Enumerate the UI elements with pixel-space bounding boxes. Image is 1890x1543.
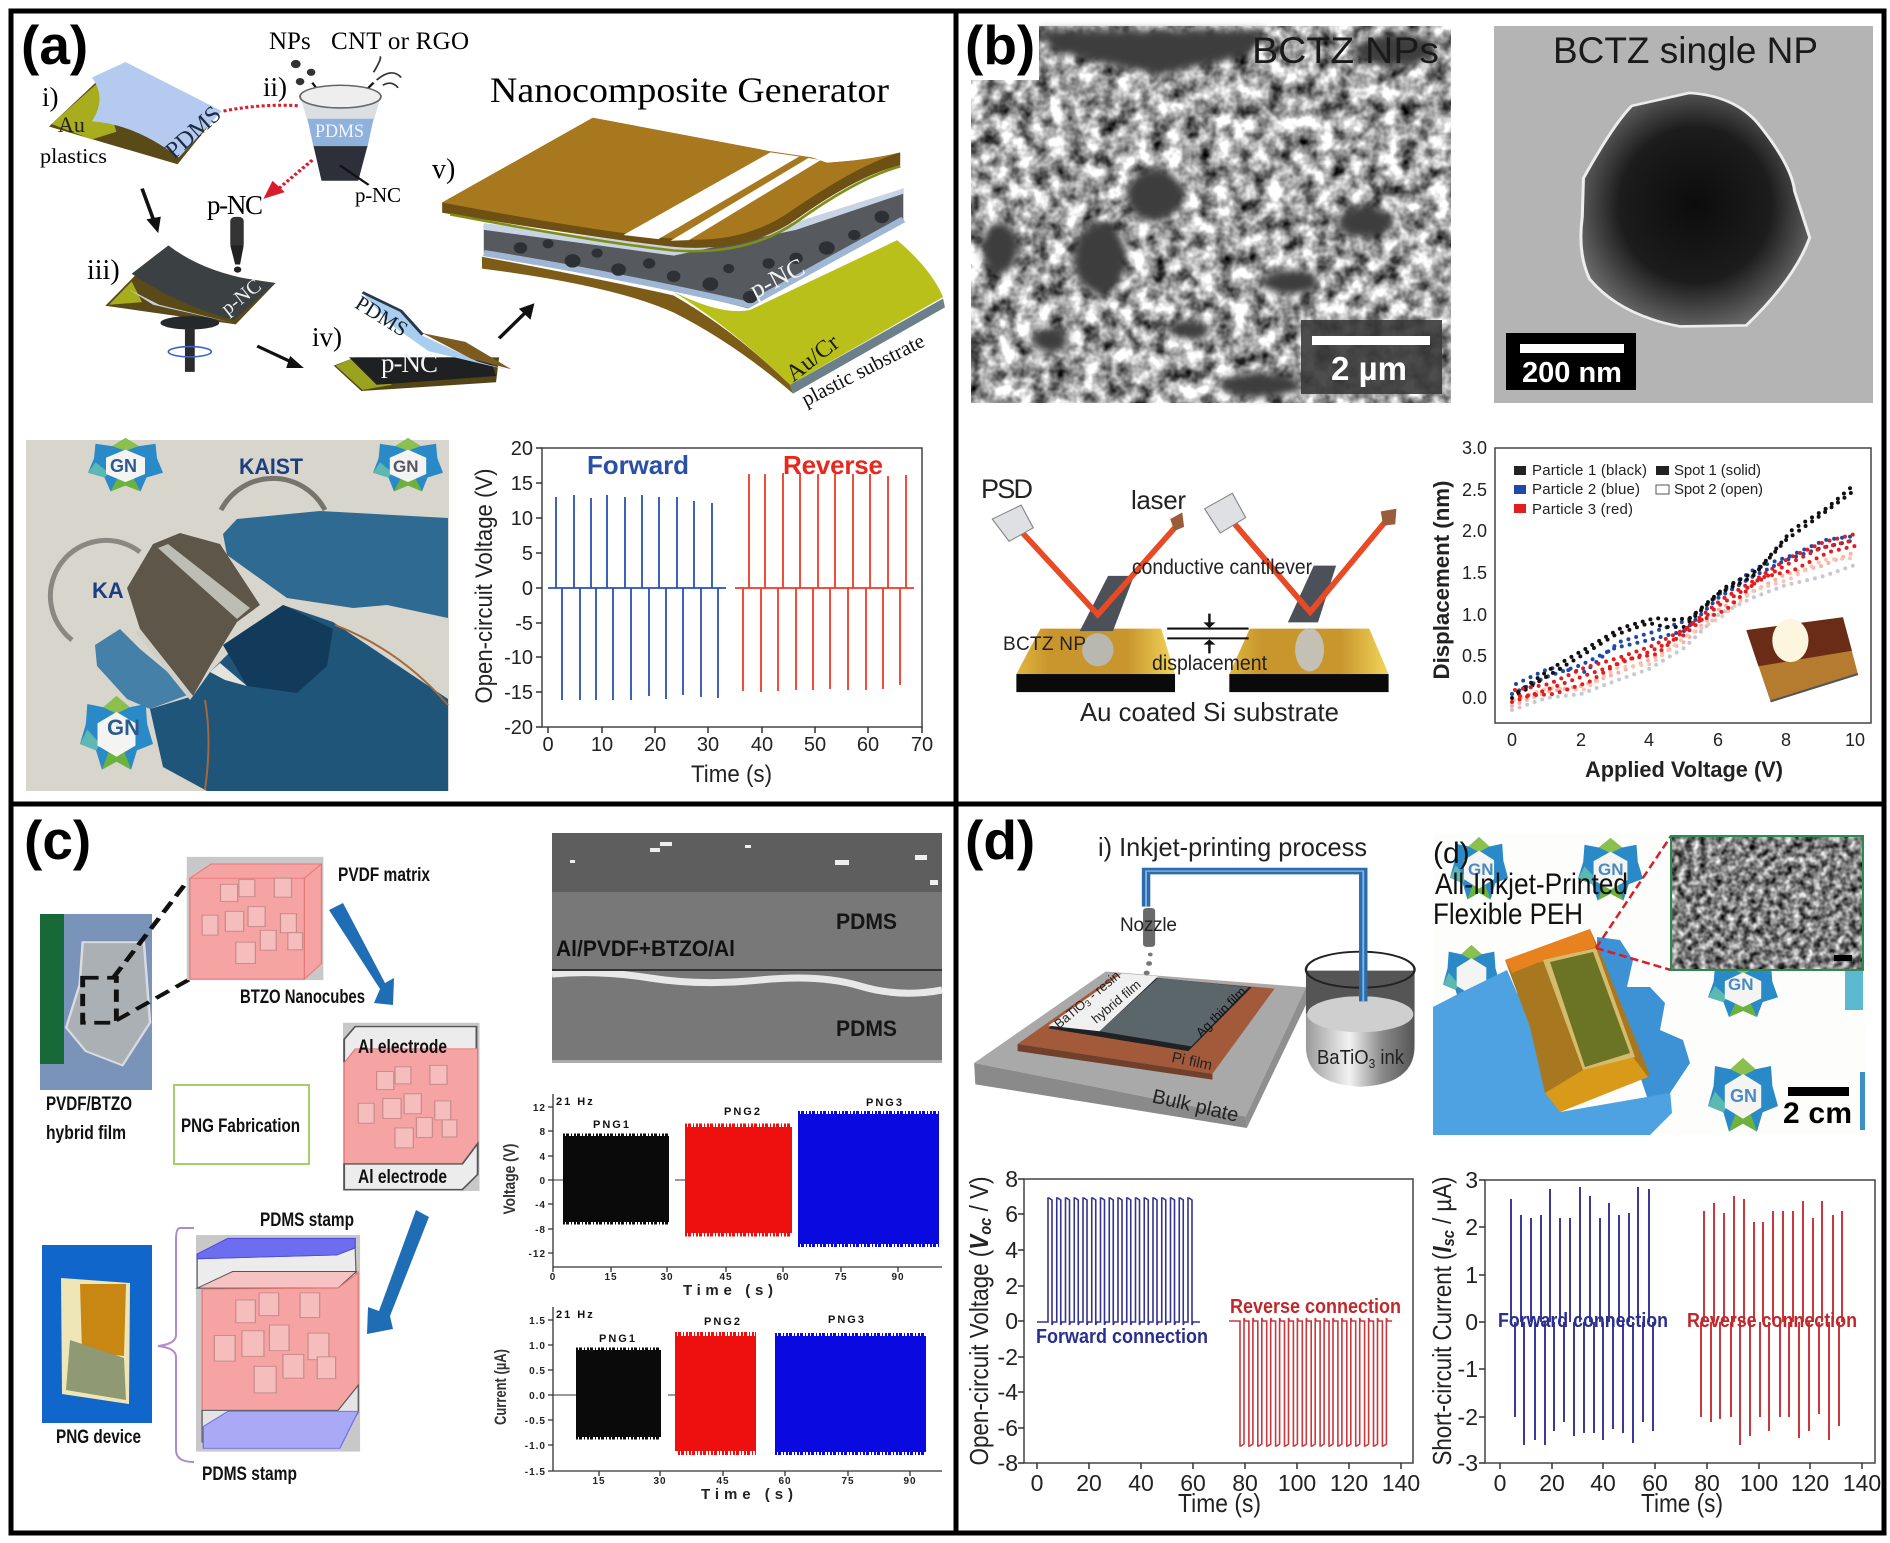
axis numbers: 2 [1465, 1214, 1478, 1240]
schematic: inkjet printing setup: BaTiO [1317, 1047, 1373, 1069]
forward series: Forward [587, 450, 689, 480]
voltage axis numbers: 30 [660, 1272, 674, 1283]
axis numbers: 4 [1005, 1237, 1018, 1263]
current axis numbers: 1.5 [529, 1316, 546, 1327]
process step i: PDMS on Au plastic: plastics [40, 144, 107, 168]
process step iii: spin coating [87, 190, 276, 372]
schematic: inkjet printing setup: Nozzle [1120, 915, 1177, 936]
chart: current of PNG1-3: 21 Hz [556, 1309, 595, 1321]
logos on photo background [50, 438, 443, 770]
chart: current of PNG1-3: PNG2 [704, 1316, 742, 1328]
GN logos on photo: GN [1730, 1086, 1757, 1106]
brace [158, 1228, 194, 1462]
process step iii: spin coating: iii) [87, 255, 120, 286]
chart: current of PNG1-3: PNG1 [599, 1333, 637, 1345]
scale bar 200 nm: 200 nm [1522, 357, 1622, 389]
diagram v: nanocomposite generator layers: Au/Cr [781, 330, 844, 387]
process step ii: cup with NPs and CNT or RGO: ii) [263, 72, 287, 102]
chart: voltage of PNG1-3: 21 Hz [556, 1096, 595, 1108]
schematic: PFM measurement of BCTZ NP: displacement [1152, 652, 1267, 675]
process step iii: spin coating: p-NC [207, 190, 263, 220]
axis numbers: 10 [1845, 730, 1865, 750]
legend: Particle 3 (red) [1532, 501, 1633, 518]
chart: voltage of PNG1-3: PNG2 [724, 1106, 762, 1118]
current axis numbers: 60 [778, 1476, 792, 1487]
GN logos on photo: GN [1598, 860, 1624, 879]
scale bar 2 µm: 2 µm [1331, 350, 1407, 387]
SEM image of BCTZ NPs [956, 14, 1451, 403]
reverse spikes [1687, 1196, 1857, 1445]
scatter data [1512, 484, 1855, 710]
axis numbers: 140 [1382, 1470, 1420, 1496]
axis numbers: 40 [1128, 1470, 1154, 1496]
voltage data blocks [553, 1114, 939, 1244]
current data blocks [553, 1336, 926, 1452]
axis numbers: -8 [998, 1450, 1018, 1476]
diagram v: nanocomposite generator layers: p-NC [745, 252, 809, 304]
axis numbers: 0 [1494, 1470, 1506, 1496]
axis numbers: 120 [1791, 1470, 1829, 1496]
chart: open-circuit voltage forward and reverse [471, 438, 933, 788]
GN logos on photo: GN [1728, 975, 1754, 994]
axis title: voltage: Open-circuit Voltage (V [964, 1215, 994, 1466]
axis ticks and numbers: 20 [644, 734, 666, 756]
axis title: current: Short-circuit Current (I [1427, 1217, 1457, 1466]
voltage axis numbers: 15 [604, 1272, 618, 1283]
axis title: current: sc [1439, 1230, 1458, 1246]
legend [1514, 462, 1763, 518]
reverse pulses [1229, 1296, 1401, 1446]
axis numbers: 2 [1005, 1273, 1018, 1299]
voltage axis numbers: 75 [834, 1272, 848, 1283]
current axis numbers: 45 [716, 1476, 730, 1487]
chart: voltage of PNG1-3: Time (s) [683, 1282, 773, 1299]
axis ticks and numbers: 40 [751, 734, 773, 756]
gloved hand [95, 511, 448, 791]
axis title: time: Time (s) [1641, 1488, 1723, 1518]
axis title: voltage: / V) [964, 1177, 994, 1218]
chart: current of PNG1-3: Current (µA) [491, 1349, 510, 1425]
axis numbers: 6 [1713, 730, 1723, 750]
legend: Particle 2 (blue) [1532, 481, 1640, 498]
SEM cross-section [552, 833, 942, 1063]
axis numbers: -2 [998, 1344, 1018, 1370]
voltage axis numbers: 4 [539, 1152, 546, 1163]
diagram v: nanocomposite generator layers: v) [432, 154, 455, 185]
schematic: PFM measurement of BCTZ NP: laser [1131, 485, 1186, 515]
chart: open-circuit voltage [964, 1166, 1420, 1518]
panel: (c) PVDF/BTZO PNG [24, 809, 942, 1503]
axis title: time: Time (s) [691, 761, 772, 788]
title: BCTZ NPs: BCTZ NPs [1252, 30, 1439, 71]
axis ticks and numbers: 50 [804, 734, 826, 756]
axis numbers: -2 [1458, 1404, 1478, 1430]
logos on photo background: GN [107, 715, 140, 740]
axis title: displacement: Displacement (nm) [1429, 480, 1454, 680]
axis numbers: 6 [1005, 1201, 1018, 1227]
voltage axis numbers: 8 [539, 1127, 546, 1138]
voltage axis numbers: 0 [550, 1272, 556, 1283]
axis numbers: -3 [1458, 1450, 1478, 1476]
axis numbers: 0 [1465, 1309, 1478, 1335]
logos on photo background: KAIST [239, 454, 304, 479]
photo: all-inkjet-printed flexible PEH: All-Inkjet-Printed [1435, 868, 1628, 901]
SEM cross-section: PDMS [836, 1016, 897, 1041]
axis ticks and numbers: 10 [591, 734, 613, 756]
axis numbers: 0 [1031, 1470, 1043, 1496]
process step ii: cup with NPs and CNT or RGO [224, 28, 469, 207]
axis ticks and numbers: -5 [515, 613, 533, 635]
axis ticks and numbers: -15 [504, 682, 533, 704]
schematic: PFM measurement of BCTZ NP: BCTZ NP [1003, 634, 1086, 655]
schematic: PFM measurement of BCTZ NP: PSD [981, 474, 1033, 504]
voltage axis numbers: -8 [535, 1225, 546, 1236]
panel: (d) inkjet printed harvester [964, 809, 1881, 1518]
axis numbers: 60 [1642, 1470, 1668, 1496]
reverse series: Reverse [783, 450, 883, 480]
current axis numbers: 15 [592, 1476, 606, 1487]
forward spikes [1498, 1187, 1668, 1445]
current axis numbers: 0.0 [529, 1391, 546, 1402]
process step iii: spin coating: p-NC [217, 275, 266, 320]
current axis numbers: 0.5 [529, 1366, 546, 1377]
process step iv: PDMS peel: p-NC [381, 348, 438, 378]
legend: Spot 1 (solid) [1674, 462, 1761, 479]
axis numbers: 2 [1576, 730, 1586, 750]
cube: PVDF matrix with BTZO nanocubes: BTZO Nanocubes [240, 987, 365, 1008]
axis numbers [1458, 1167, 1881, 1496]
axis title: time: Time (s) [1178, 1488, 1261, 1518]
axis numbers [998, 1166, 1420, 1496]
axis numbers: 3 [1465, 1167, 1478, 1193]
axis numbers: 140 [1843, 1470, 1881, 1496]
legend: Particle 1 (black) [1532, 462, 1647, 479]
flexible film [127, 533, 448, 790]
inset: SEM of film [1671, 836, 1863, 970]
photo: hybrid film [40, 880, 190, 1144]
voltage axis numbers: 45 [719, 1272, 733, 1283]
schematic: inkjet printing setup: - resin [1083, 968, 1123, 1005]
photo: all-inkjet-printed flexible PEH: (d) [1433, 837, 1470, 870]
axis numbers: 0.0 [1462, 688, 1487, 708]
schematic: inkjet printing setup [974, 871, 1415, 1128]
schematic: PFM measurement of BCTZ NP: Au coated Si substrate [1080, 697, 1339, 727]
photo: all-inkjet-printed flexible PEH: Flexible PEH [1433, 898, 1583, 931]
voltage axis numbers: -4 [535, 1200, 546, 1211]
inset: AFM topography [1746, 617, 1858, 701]
scale bar 200 nm [1506, 333, 1636, 390]
gloved hand [1433, 937, 1690, 1135]
SEM cross-section: Al/PVDF+BTZO/Al [556, 936, 735, 961]
scale bar 2 µm [1301, 320, 1442, 394]
forward pulses: Forward connection [1036, 1326, 1208, 1348]
axis ticks and numbers [504, 438, 933, 756]
process step iv: PDMS peel: iv) [312, 322, 342, 352]
axis title: applied voltage: Applied Voltage (V) [1585, 757, 1783, 782]
cube: PVDF matrix with BTZO nanocubes [187, 857, 430, 1008]
axis numbers: 1.5 [1462, 563, 1487, 583]
chart: voltage of PNG1-3 [500, 1094, 942, 1299]
panel label c: (c) [24, 809, 91, 871]
axis ticks and numbers: -20 [504, 717, 533, 739]
panel label b: (b) [965, 14, 1035, 76]
schematic: inkjet printing setup: 3 [1369, 1056, 1375, 1071]
voltage axis numbers: -12 [529, 1249, 546, 1260]
cube: with Al electrodes: Al electrode [358, 1037, 447, 1058]
schematic: inkjet printing setup: 3 [1083, 998, 1093, 1009]
axis ticks and numbers: 30 [697, 734, 719, 756]
photo: hybrid film: hybrid film [46, 1123, 126, 1144]
chart: voltage of PNG1-3: PNG1 [593, 1119, 631, 1131]
chart: short-circuit current [1427, 1167, 1881, 1518]
axis title: current: / µA) [1427, 1176, 1457, 1230]
diagram v: nanocomposite generator layers [432, 118, 945, 411]
current axis numbers: 30 [653, 1476, 667, 1487]
voltage axis numbers [529, 1103, 905, 1283]
axis title: voltage: Open-circuit Voltage (V) [471, 468, 498, 704]
axis ticks and numbers: 0 [522, 578, 533, 600]
logos on photo background: GN [393, 457, 418, 476]
schematic: PFM measurement of BCTZ NP [981, 474, 1396, 727]
reverse series [735, 450, 914, 692]
schematic: PFM measurement of BCTZ NP: conductive cantilever [1132, 556, 1312, 579]
axis numbers: -6 [998, 1415, 1018, 1441]
cube: complete PNG with PDMS stamps: PDMS stamp [260, 1210, 354, 1231]
current axis numbers: 90 [903, 1476, 917, 1487]
process step ii: cup with NPs and CNT or RGO: NPs [269, 28, 311, 55]
reverse pulses: Reverse connection [1230, 1296, 1401, 1318]
forward series [548, 450, 726, 700]
logos on photo background: GN [110, 456, 137, 476]
axis numbers: 1.0 [1462, 605, 1487, 625]
printed harvester device [1505, 929, 1650, 1112]
axis numbers: 0 [1005, 1308, 1018, 1334]
process step i: PDMS on Au plastic: i) [42, 82, 58, 112]
voltage axis numbers: 60 [776, 1272, 790, 1283]
photo: PNG device [42, 1245, 152, 1448]
cube: PVDF matrix with BTZO nanocubes: PVDF matrix [338, 865, 430, 886]
axis numbers: 4 [1644, 730, 1654, 750]
axis ticks and numbers: -10 [504, 647, 533, 669]
axis numbers: -1 [1458, 1356, 1478, 1382]
axis numbers: 80 [1694, 1470, 1720, 1496]
current axis numbers: -1.5 [525, 1467, 546, 1478]
axis numbers: 80 [1232, 1470, 1258, 1496]
process step i: PDMS on Au plastic: PDMS [161, 101, 227, 164]
chart: current of PNG1-3 [491, 1307, 942, 1503]
panel: (b) BCTZ nanoparticles [956, 14, 1873, 782]
photo: PNG device: PNG device [56, 1427, 141, 1448]
process step iv: PDMS peel [312, 291, 511, 391]
current axis numbers [525, 1316, 917, 1487]
chart: displacement versus applied voltage [1429, 438, 1871, 782]
axis ticks and numbers: 10 [511, 508, 533, 530]
axis numbers: 1 [1465, 1262, 1478, 1288]
cube: complete PNG with PDMS stamps [196, 1210, 360, 1485]
current axis numbers: -1.0 [525, 1441, 546, 1452]
photo: all-inkjet-printed flexible PEH [1433, 833, 1865, 1135]
axis numbers: 8 [1781, 730, 1791, 750]
logos on photo background: KA [92, 578, 124, 603]
axis numbers: 40 [1590, 1470, 1616, 1496]
scale bar 2 cm: 2 cm [1783, 1097, 1852, 1130]
photo: flexible device held in glove [26, 438, 449, 791]
axis numbers: -4 [998, 1379, 1018, 1405]
schematic: inkjet printing setup: Pi film [1170, 1049, 1214, 1074]
axis numbers: 120 [1330, 1470, 1368, 1496]
forward spikes: Forward connection [1498, 1310, 1668, 1332]
chart: current of PNG1-3: PNG3 [828, 1314, 866, 1326]
axis numbers: 100 [1278, 1470, 1316, 1496]
legend: Spot 2 (open) [1674, 481, 1763, 498]
panel label d: (d) [965, 809, 1035, 871]
axis ticks and numbers: 60 [857, 734, 879, 756]
voltage axis numbers: 0 [539, 1176, 546, 1187]
schematic: inkjet printing setup: hybrid film [1089, 977, 1144, 1026]
reverse spikes: Reverse connection [1687, 1310, 1857, 1332]
axis numbers: 60 [1180, 1470, 1206, 1496]
forward pulses [1036, 1198, 1208, 1348]
axis ticks and numbers: 70 [911, 734, 933, 756]
process step i: PDMS on Au plastic: Au [58, 112, 85, 137]
current axis numbers: -0.5 [525, 1416, 546, 1427]
cube: complete PNG with PDMS stamps: PDMS stamp [202, 1464, 297, 1485]
axis numbers: 100 [1740, 1470, 1778, 1496]
axis ticks and numbers: 0 [542, 734, 554, 756]
voltage axis numbers: 90 [891, 1272, 905, 1283]
axis title: voltage: oc [976, 1217, 995, 1235]
current axis numbers: 75 [841, 1476, 855, 1487]
voltage axis numbers: 12 [533, 1103, 546, 1114]
axis numbers: 0.5 [1462, 646, 1487, 666]
heading: Nanocomposite Generator: Nanocomposite Generator [490, 70, 889, 110]
panel: (a) nanocomposite generator [21, 14, 945, 791]
process step ii: cup with NPs and CNT or RGO: PDMS [315, 121, 364, 142]
axis numbers: 0 [1507, 730, 1517, 750]
schematic: inkjet printing setup: ink [1375, 1047, 1405, 1069]
box: PNG Fabrication [174, 1085, 309, 1164]
current axis numbers: 1.0 [529, 1341, 546, 1352]
process step i: PDMS on Au plastic [40, 62, 227, 168]
process step ii: cup with NPs and CNT or RGO: CNT or RGO [331, 28, 469, 55]
axis ticks and numbers: 20 [511, 438, 533, 460]
axis numbers: 20 [1076, 1470, 1102, 1496]
axis numbers: 20 [1539, 1470, 1565, 1496]
schematic: inkjet printing setup: BaTiO [1051, 997, 1089, 1031]
axis numbers: 2.0 [1462, 521, 1487, 541]
diagram v: nanocomposite generator layers: plastic substrate [797, 328, 928, 411]
schematic: inkjet printing setup: Bulk plate [1150, 1086, 1241, 1127]
panel label a: (a) [21, 14, 88, 76]
SEM cross-section: PDMS [836, 909, 897, 934]
process step ii: cup with NPs and CNT or RGO: p-NC [355, 183, 401, 207]
chart: voltage of PNG1-3: PNG3 [866, 1097, 904, 1109]
axis numbers [1462, 438, 1865, 750]
chart: voltage of PNG1-3: Voltage (V) [500, 1144, 519, 1214]
axis numbers: 2.5 [1462, 480, 1487, 500]
box: PNG Fabrication: PNG Fabrication [181, 1116, 300, 1137]
TEM image of single BCTZ NP [1494, 26, 1873, 403]
arrow: step 2 [367, 1210, 429, 1334]
chart: current of PNG1-3: Time (s) [701, 1486, 793, 1503]
cube: with Al electrodes [343, 1023, 480, 1191]
process step iv: PDMS peel: PDMS [351, 291, 412, 341]
GN logos on photo: GN [1468, 860, 1494, 879]
schematic: inkjet printing setup: Ag thin film [1193, 984, 1249, 1040]
axis numbers: 3.0 [1462, 438, 1487, 458]
axis ticks and numbers: 15 [511, 473, 533, 495]
process arrows [142, 189, 534, 368]
arrow: step 1 [329, 903, 394, 1005]
axis ticks and numbers: 5 [522, 543, 533, 565]
title: BCTZ single NP: BCTZ single NP [1553, 30, 1818, 71]
axis numbers: 8 [1005, 1166, 1018, 1192]
GN logos on photo [1443, 837, 1865, 1132]
cube: with Al electrodes: Al electrode [358, 1167, 447, 1188]
photo: hybrid film: PVDF/BTZO [46, 1094, 132, 1115]
heading: inkjet-printing process: i) Inkjet-printing process [1098, 832, 1367, 862]
